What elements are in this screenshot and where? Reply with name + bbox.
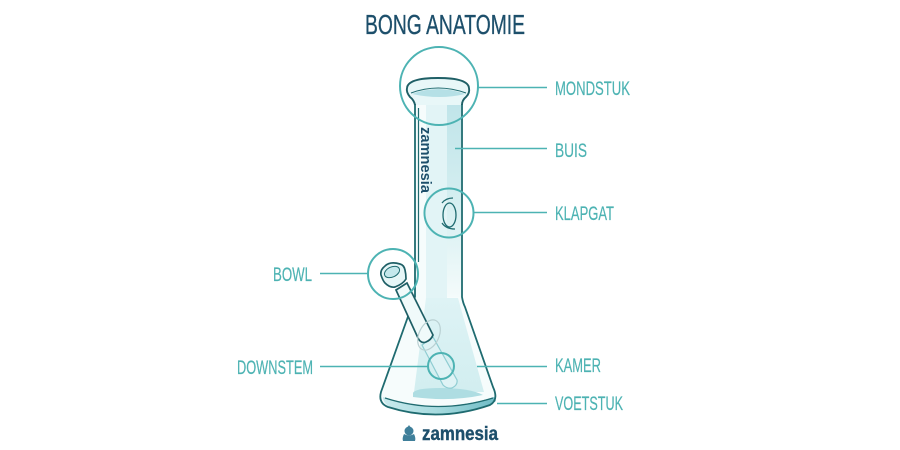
mouthpiece inner <box>412 89 465 97</box>
label: klapgat: KLAPGAT <box>555 203 614 225</box>
mouthpiece lip <box>411 88 466 93</box>
callout circles and leader lines <box>320 47 547 404</box>
right tube shade <box>447 100 461 297</box>
body outline <box>380 104 495 415</box>
label: bowl: BOWL <box>273 264 312 286</box>
bong illustration <box>380 78 496 415</box>
label: mondstuk: MONDSTUK <box>555 78 630 100</box>
mouthpiece outline <box>407 78 469 105</box>
bowl <box>381 263 406 287</box>
title: BONG ANATOMIE <box>365 9 525 40</box>
tube centre light <box>426 100 447 300</box>
carb hole <box>442 198 456 229</box>
base glass <box>383 397 496 414</box>
inner base line <box>385 398 493 406</box>
label: buis: BUIS <box>555 140 587 162</box>
downstem upper <box>396 283 433 342</box>
logo <box>403 424 498 445</box>
label: downstem: DOWNSTEM <box>237 357 313 379</box>
mouthpiece fill <box>407 78 469 105</box>
logo wordmark: zamnesia <box>422 424 498 445</box>
inner tube line <box>418 108 420 262</box>
brand on tube: zamnesia <box>417 127 434 194</box>
logo icon <box>403 425 415 441</box>
downstem joint <box>413 316 445 354</box>
base water <box>413 388 483 399</box>
label: kamer: KAMER <box>555 355 601 377</box>
glass body fill <box>380 100 496 413</box>
cone light band <box>414 298 484 392</box>
label: voetstuk: VOETSTUK <box>555 393 623 415</box>
bowl opening <box>383 264 401 280</box>
downstem lower <box>422 337 457 388</box>
